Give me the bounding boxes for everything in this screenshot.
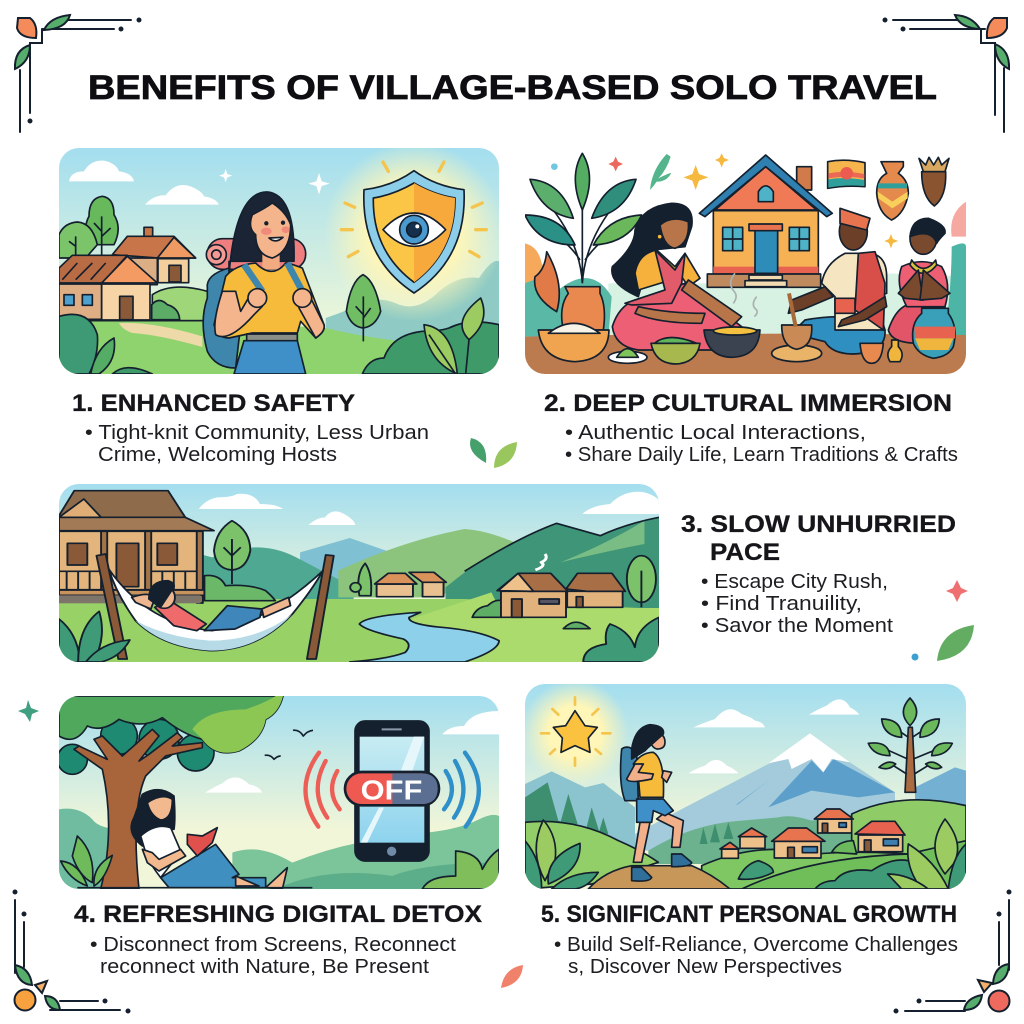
panel 2: deep cultural immersion illustration: [525, 150, 966, 374]
stilt house: [59, 491, 214, 603]
sun rays: [341, 162, 486, 257]
heading 4: 4. REFRESHING DIGITAL DETOX: [74, 901, 482, 928]
text block 3: • Escape City Rush,: [701, 571, 888, 593]
village houses: [720, 809, 905, 858]
heading 3: PACE: [710, 539, 780, 566]
text block 2: [565, 422, 958, 466]
corner ornament: bottom left: [14, 890, 130, 1012]
left foliage: [61, 836, 112, 886]
corner ornament: top right: [884, 15, 1009, 132]
woman cooking: [612, 203, 742, 350]
icon: eye shield: [364, 171, 464, 293]
text block 5: s, Discover New Perspectives: [568, 956, 842, 978]
ground and river: [59, 599, 659, 662]
title: BENEFITS OF VILLAGE-BASED SOLO TRAVEL: [88, 69, 937, 107]
painted pot and cups: [860, 308, 955, 363]
vase: [877, 162, 908, 220]
birds: [265, 730, 313, 759]
text block 2: • Share Daily Life, Learn Traditions & Crafts: [565, 444, 958, 466]
text block 4: reconnect with Nature, Be Present: [100, 956, 429, 978]
text block 5: • Build Self-Reliance, Overcome Challenges: [554, 934, 958, 956]
traveller: [203, 192, 324, 374]
heading 3: [681, 511, 956, 566]
seated man: [788, 208, 887, 354]
text block 1: Crime, Welcoming Hosts: [98, 444, 337, 466]
star with rays: [541, 697, 610, 766]
right foliage: [422, 849, 499, 889]
right foliage: [738, 819, 966, 889]
icon: small leaf: [501, 965, 523, 988]
decorations: [551, 153, 898, 248]
distant houses: [375, 572, 446, 597]
heading 5: 5. SIGNIFICANT PERSONAL GROWTH: [541, 901, 957, 928]
text block 1: [85, 422, 429, 466]
heading 1: 1. ENHANCED SAFETY: [72, 390, 355, 417]
seated woman: [888, 218, 950, 343]
hiker: [621, 725, 692, 881]
text block 4: [90, 934, 456, 978]
panel 5: significant personal growth illustration: [522, 679, 966, 889]
front house: [59, 255, 157, 320]
text block 3: • Find Tranuility,: [701, 593, 862, 615]
heading 2: 2. DEEP CULTURAL IMMERSION: [544, 390, 952, 417]
back house: [112, 227, 196, 285]
icon: phone off: OFF: [361, 774, 422, 805]
text block 5: [554, 934, 958, 978]
corner ornament: bottom right: [894, 890, 1010, 1012]
panel 1: enhanced safety illustration: [59, 141, 504, 374]
text block 2: • Authentic Local Interactions,: [565, 422, 866, 444]
near houses: [472, 556, 656, 617]
reading woman: [131, 790, 287, 889]
corner ornament: top left: [15, 15, 140, 132]
growth tree: [868, 698, 952, 792]
icon: sparkle and leaf: [912, 580, 974, 661]
text block 3: [701, 571, 893, 637]
hammock and posts: [96, 554, 334, 659]
text block 4: • Disconnect from Screens, Reconnect: [90, 934, 456, 956]
hills: [525, 800, 966, 889]
trees behind the houses: [59, 196, 118, 258]
mortar and pestle: [772, 293, 822, 362]
flag: [828, 160, 865, 188]
tree: [57, 696, 283, 889]
house: [699, 155, 832, 287]
heading 3: 3. SLOW UNHURRIED: [681, 511, 956, 538]
left foliage: [525, 820, 598, 889]
icon: teal star: [18, 700, 39, 722]
right foliage: [362, 298, 499, 374]
bowls: [538, 323, 760, 364]
mountains: [187, 517, 659, 609]
left foliage: [59, 314, 152, 374]
text block 3: • Savor the Moment: [701, 615, 893, 637]
icon: leaves: [470, 438, 517, 468]
mask: [919, 157, 949, 206]
steam: [731, 273, 757, 317]
panel 3: slow unhurried pace illustration: [59, 484, 659, 662]
icon: phone off: [305, 721, 479, 861]
plant: [525, 153, 642, 330]
mountains: [525, 733, 966, 864]
tree and bushes: [204, 521, 371, 601]
right tree: [346, 275, 381, 341]
text block 1: • Tight-knit Community, Less Urban: [85, 422, 429, 444]
panel 4: refreshing digital detox illustration: [57, 696, 499, 889]
foliage: [59, 611, 659, 662]
